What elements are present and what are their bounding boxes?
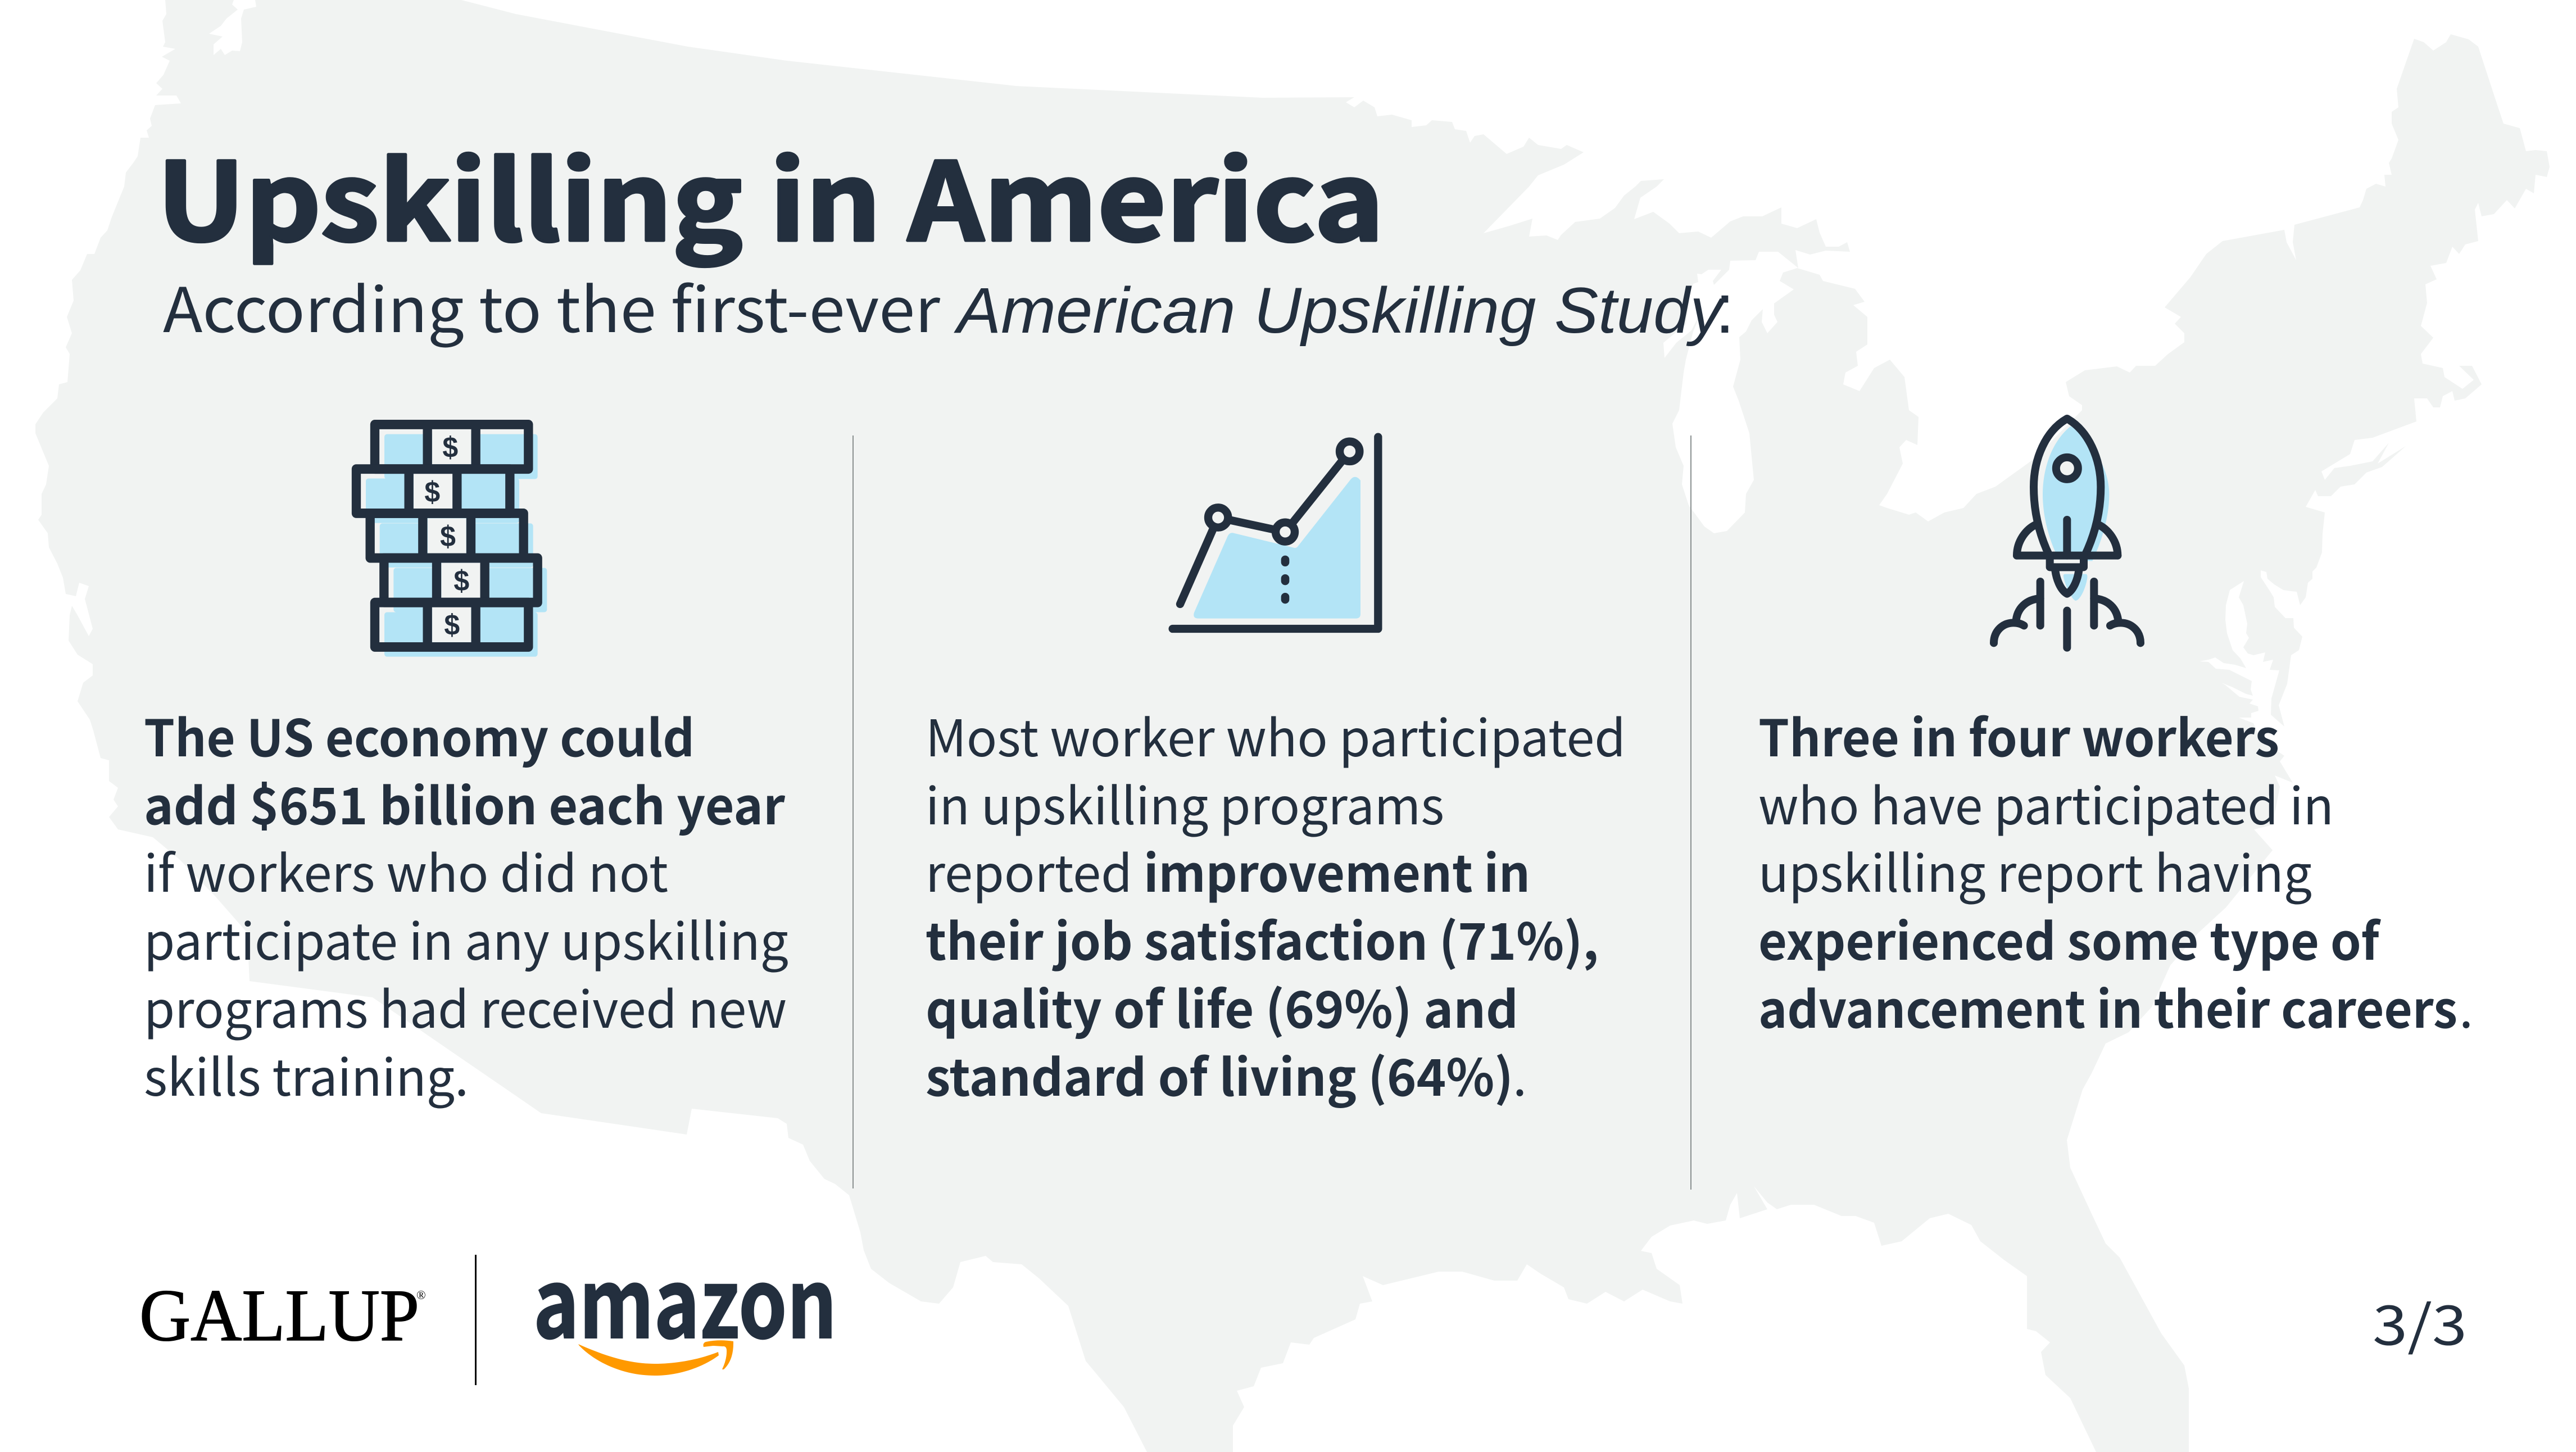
icon: stacked dollar bills: $ xyxy=(424,475,440,508)
subtitle: American Upskilling Study xyxy=(954,275,1727,347)
logo: Gallup: GALLUP xyxy=(139,1274,419,1356)
subtitle: : xyxy=(1715,270,1735,348)
column 2 text: quality of life (69%) and xyxy=(926,969,1518,1042)
column 2 text: reported xyxy=(926,833,1132,906)
column 2 text: standard of living (64%) xyxy=(926,1037,1513,1110)
icon: stacked dollar bills: $ xyxy=(442,431,458,464)
column 1 text: The US economy could xyxy=(144,698,695,771)
icon: line chart xyxy=(1173,437,1378,629)
column 2 text: their job satisfaction (71%), xyxy=(926,901,1599,974)
icon: stacked dollar bills: $ xyxy=(444,609,460,641)
column 3 text: experienced some type of xyxy=(1758,901,2381,974)
icon: stacked dollar bills: $ xyxy=(440,520,456,552)
column 2 text: in upskilling programs xyxy=(926,766,1444,839)
logo: Amazon: amazon xyxy=(533,1227,837,1365)
title: Upskilling in America xyxy=(157,116,1384,272)
column 1 text: if workers who did not xyxy=(144,833,668,906)
column 3 text: advancement in their careers xyxy=(1758,969,2457,1042)
column 1 text: programs had received new xyxy=(144,969,787,1042)
column 1 text: skills training. xyxy=(144,1037,469,1110)
column 3 text: Three in four workers xyxy=(1758,698,2279,771)
column 3 text xyxy=(1758,698,2473,1042)
column 1 text: add $651 billion each year xyxy=(144,766,786,839)
logo divider xyxy=(475,1255,477,1385)
column 1 text: participate in any upskilling xyxy=(144,901,788,974)
divider 1 xyxy=(852,435,854,1188)
column 1 text xyxy=(144,698,788,1110)
column 2 text xyxy=(926,698,1626,1110)
divider 2 xyxy=(1690,435,1691,1190)
column 3 text: who have participated in xyxy=(1758,766,2334,839)
column 3 text: upskilling report having xyxy=(1758,833,2312,906)
icon: stacked dollar bills xyxy=(356,424,547,657)
column 2 text: . xyxy=(1513,1037,1527,1110)
column 2 text: improvement in xyxy=(1144,833,1530,906)
subtitle xyxy=(163,260,1735,350)
icon: stacked dollar bills: $ xyxy=(453,564,469,597)
icon: rocket xyxy=(1994,419,2140,648)
column 2 text: Most worker who participated xyxy=(926,698,1626,771)
logo: Gallup: ® xyxy=(416,1288,426,1302)
page number: 3/3 xyxy=(2373,1281,2467,1360)
column 3 text: . xyxy=(2459,969,2473,1042)
subtitle: According to the first-ever xyxy=(163,260,940,350)
